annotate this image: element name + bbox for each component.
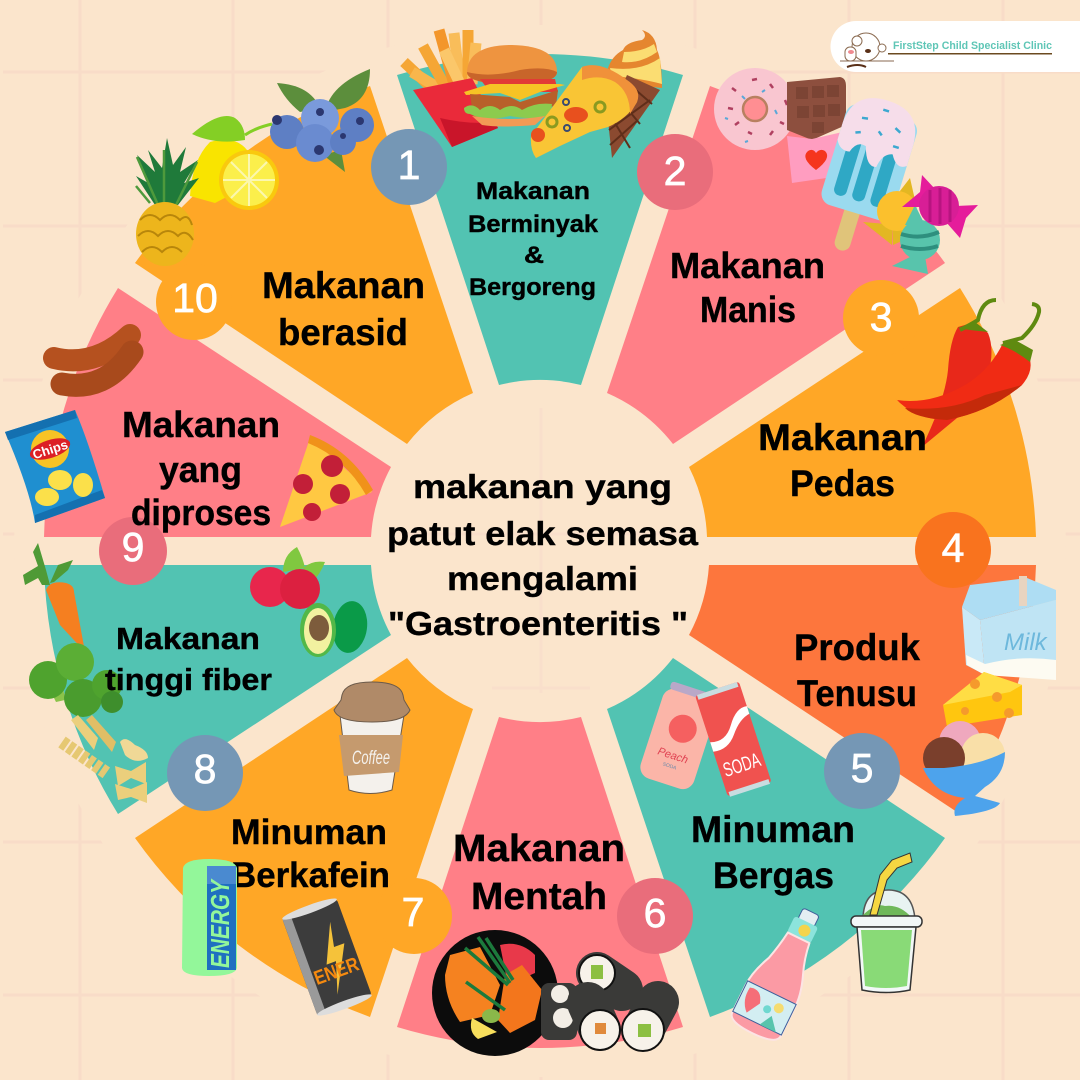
icon: raspberries bbox=[250, 547, 325, 609]
number badge 9 bbox=[99, 517, 167, 585]
number badge 2: 2 bbox=[664, 148, 686, 194]
icon: ice cream bowl bbox=[923, 721, 1005, 816]
number badge 2 bbox=[637, 134, 713, 210]
label: makanan tinggi fiber bbox=[105, 621, 272, 697]
label: centre heading: "Gastroenteritis " bbox=[388, 605, 688, 642]
number badge 3 bbox=[843, 280, 919, 356]
number badge 10 bbox=[156, 264, 232, 340]
label: makanan berminyak dan bergoreng bbox=[468, 178, 599, 301]
label: makanan berasid: Makanan bbox=[262, 265, 425, 306]
number badge 6 bbox=[617, 878, 693, 954]
icon: coffee cup: Coffee bbox=[352, 748, 390, 769]
label: makanan yang diproses: yang bbox=[159, 449, 242, 490]
icon: peach soda can: Peach bbox=[656, 745, 690, 767]
icon: sushi rolls bbox=[541, 955, 664, 1051]
number badge 7: 7 bbox=[402, 889, 424, 935]
icon: ice cream cone bbox=[608, 30, 662, 158]
panel: wedge 10 makanan berasid bbox=[135, 86, 473, 444]
panel: wedge 6 makanan mentah bbox=[397, 717, 683, 1048]
icon: avocados bbox=[300, 599, 370, 657]
label: makanan pedas: Makanan bbox=[758, 417, 927, 458]
label: makanan mentah bbox=[453, 828, 625, 918]
number badge 8: 8 bbox=[194, 746, 216, 792]
label: makanan tinggi fiber: tinggi fiber bbox=[105, 662, 272, 697]
number badge 6: 6 bbox=[644, 890, 666, 936]
label: minuman bergas bbox=[691, 809, 855, 896]
number badge 9: 9 bbox=[122, 524, 144, 570]
panel: wedge 3 makanan pedas bbox=[689, 288, 1036, 537]
label: makanan tinggi fiber: Makanan bbox=[116, 621, 260, 656]
label: minuman berkafein: Minuman bbox=[231, 813, 387, 852]
icon: pasta bbox=[62, 715, 148, 803]
label: produk tenusu: Produk bbox=[794, 627, 920, 668]
icon: chillies bbox=[895, 300, 1039, 447]
label: makanan berasid: berasid bbox=[278, 312, 408, 353]
label: produk tenusu: Tenusu bbox=[797, 673, 917, 714]
number badge 1: 1 bbox=[398, 142, 420, 188]
label: makanan berminyak dan bergoreng: Berminyak bbox=[468, 211, 599, 238]
label: makanan berminyak dan bergoreng: & bbox=[524, 242, 544, 269]
icon: yellow candy bbox=[863, 178, 917, 245]
icon: ramune bottle bbox=[728, 900, 836, 1045]
label: minuman bergas: Minuman bbox=[691, 809, 855, 850]
icon: peach soda can: SODA bbox=[662, 761, 678, 772]
label: makanan manis bbox=[670, 245, 825, 330]
number badge 7 bbox=[376, 878, 452, 954]
icon: sashimi plate bbox=[432, 930, 558, 1056]
icon: pepperoni pizza bbox=[280, 435, 373, 527]
label: makanan mentah: Mentah bbox=[471, 876, 607, 918]
label: centre heading: makanan yang bbox=[413, 468, 672, 505]
label: makanan berminyak dan bergoreng: Bergoreng bbox=[469, 274, 596, 301]
label: makanan pedas bbox=[758, 417, 927, 504]
icon: coffee cup bbox=[334, 682, 410, 794]
panel: wedge 4 produk tenusu bbox=[689, 565, 1036, 814]
number badge 4: 4 bbox=[942, 525, 964, 571]
icon: pizza slice bbox=[531, 65, 638, 158]
icon: green energy can bbox=[182, 859, 237, 976]
icon: donut bbox=[714, 68, 796, 150]
panel: wedge 9 makanan diproses bbox=[44, 288, 391, 537]
label: makanan mentah: Makanan bbox=[453, 828, 625, 870]
icon: chips bag bbox=[5, 410, 105, 523]
logo pill bbox=[831, 21, 1080, 72]
icon: cheese bbox=[943, 672, 1022, 727]
icon: lemon bbox=[190, 116, 279, 210]
number badge 5 bbox=[824, 733, 900, 809]
icon: red soda can bbox=[695, 681, 772, 797]
icon: broccoli bbox=[29, 643, 123, 717]
icon: fries bbox=[404, 30, 498, 147]
icon: blueberries bbox=[270, 69, 374, 172]
panel: wedge 7 minuman berkafein bbox=[135, 658, 473, 1017]
label: makanan manis: Makanan bbox=[670, 245, 825, 286]
icon: burger bbox=[464, 45, 565, 126]
icon: milk carton bbox=[962, 576, 1056, 680]
label: minuman berkafein: Berkafein bbox=[231, 856, 390, 895]
icon: milk carton: Milk bbox=[1004, 629, 1049, 656]
icon: green smoothie bbox=[851, 853, 922, 992]
label: minuman bergas: Bergas bbox=[713, 855, 834, 896]
icon: magenta candy bbox=[902, 175, 978, 238]
number badge 8 bbox=[167, 735, 243, 811]
icon: carrot bbox=[23, 543, 85, 652]
label: makanan yang diproses: Makanan bbox=[122, 404, 280, 445]
panel: wedge 1 makanan berminyak bbox=[397, 54, 683, 385]
icon: sausages bbox=[54, 335, 132, 385]
number badge 4 bbox=[915, 512, 991, 588]
labels bbox=[105, 178, 927, 918]
label: produk tenusu bbox=[794, 627, 920, 714]
panel: wedge 8 makanan tinggi fiber bbox=[44, 565, 391, 814]
icon: green energy can: ENERGY bbox=[205, 878, 235, 968]
icon: chips bag: Chips bbox=[31, 437, 70, 462]
icon: dark energy can: ENER bbox=[311, 953, 362, 990]
panel: wedge 2 makanan manis bbox=[607, 86, 945, 444]
number badge 5: 5 bbox=[851, 745, 873, 791]
icon: chocolate bar bbox=[787, 77, 847, 183]
icon: red soda can: SODA bbox=[720, 749, 764, 782]
label: centre heading: patut elak semasa bbox=[387, 515, 699, 552]
clinic name: FirstStep Child Specialist Clinic bbox=[893, 40, 1052, 52]
label: centre heading bbox=[387, 468, 699, 642]
label: minuman berkafein bbox=[231, 813, 390, 895]
icon: teal candy bbox=[892, 205, 940, 274]
label: makanan yang diproses: diproses bbox=[131, 492, 271, 533]
icon: pineapple bbox=[136, 138, 199, 266]
icon: popsicle bbox=[807, 90, 924, 262]
icon: peach soda can bbox=[637, 680, 721, 792]
label: makanan yang diproses bbox=[122, 404, 280, 533]
icon: clinic bear bbox=[840, 33, 894, 67]
number badge 1 bbox=[371, 129, 447, 205]
label: makanan manis: Manis bbox=[700, 289, 796, 330]
label: makanan pedas: Pedas bbox=[790, 463, 895, 504]
label: centre heading: mengalami bbox=[447, 560, 638, 597]
number badge 3: 3 bbox=[870, 294, 892, 340]
label: makanan berminyak dan bergoreng: Makanan bbox=[476, 178, 590, 205]
number badge 10: 10 bbox=[172, 275, 218, 321]
icon: dark energy can bbox=[281, 895, 373, 1019]
panel: wedge 5 minuman bergas bbox=[607, 658, 945, 1017]
label: makanan berasid bbox=[262, 265, 425, 353]
